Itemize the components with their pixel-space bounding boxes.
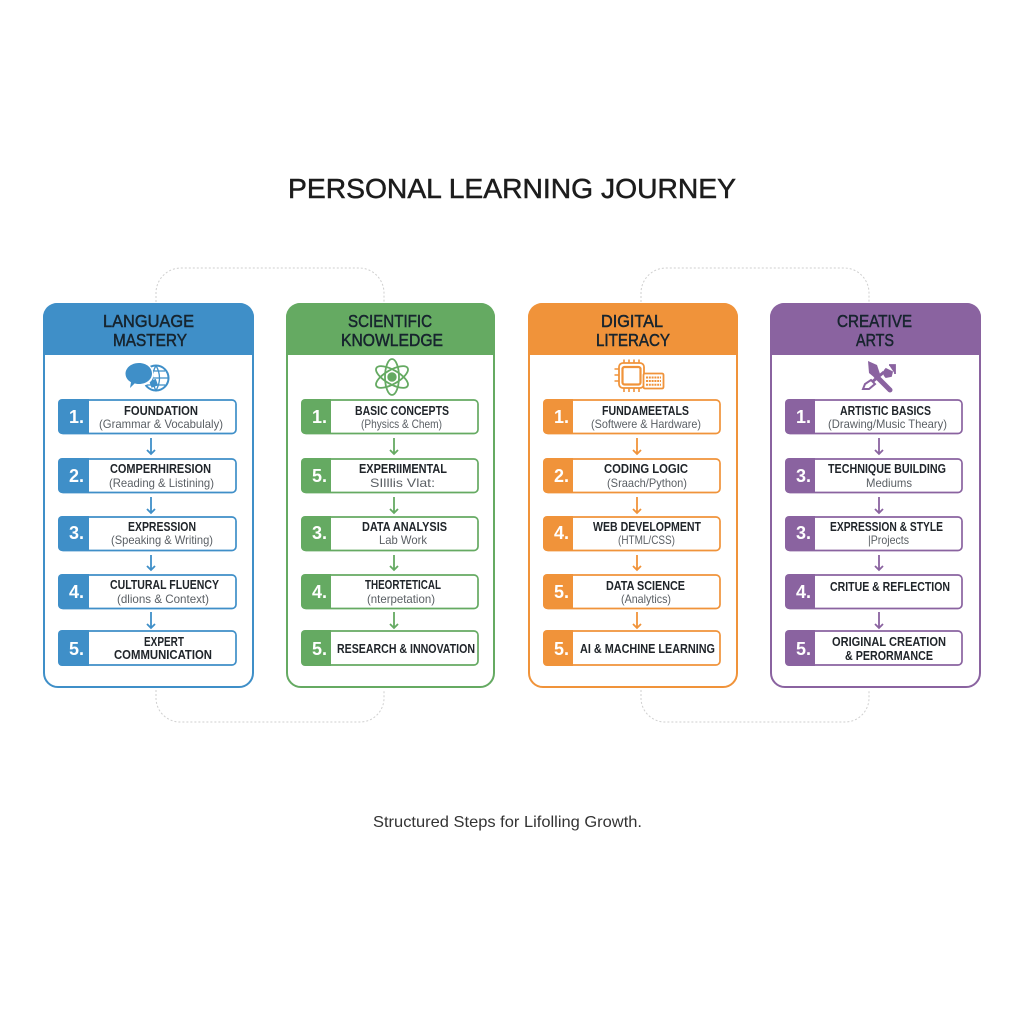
step 1: fundamentals: (Softwere & Hardware): [591, 417, 701, 431]
arrow: [147, 497, 155, 513]
panel: digital literacy: [528, 303, 738, 687]
step 2: coding logic: CODING LOGIC: [604, 462, 688, 476]
arrow: [875, 555, 883, 570]
arrow: [147, 438, 155, 454]
icon: crossed brush and tools: [863, 361, 895, 390]
step 1: artistic basics: [785, 399, 962, 434]
step 5: original creation: ORIGINAL CREATION: [832, 635, 946, 649]
step 3: expression: (Speaking & Writing): [111, 533, 213, 547]
step 1: artistic basics: ARTISTIC BASICS: [840, 404, 931, 418]
step 1: basic concepts: 1.: [312, 407, 327, 427]
arrow: [147, 612, 155, 628]
heading: language mastery: LANGUAGE: [103, 311, 194, 331]
arrow: [875, 438, 883, 454]
panel: creative arts: [770, 303, 981, 687]
step 2: experimental: EXPERIIMENTAL: [359, 462, 447, 476]
step 4: critique and reflection: 4.: [796, 582, 811, 602]
step 3: web development: [543, 516, 720, 551]
step 2: experimental: [301, 458, 478, 493]
step 3: expression and style: |Projects: [868, 533, 909, 547]
panel: scientific knowledge: [286, 303, 495, 687]
step 4: theoretical: [301, 574, 478, 609]
step 1: fundamentals: [543, 399, 720, 434]
step 5: expert communication: EXPERT: [144, 635, 184, 649]
heading: creative arts: CREATIVE: [837, 311, 912, 331]
step 2: coding logic: [543, 458, 720, 493]
heading: scientific knowledge: KNOWLEDGE: [341, 330, 443, 350]
step 1: artistic basics: 1.: [796, 407, 811, 427]
arrow: [875, 612, 883, 628]
heading: language mastery: [103, 311, 194, 350]
step 3: expression and style: 3.: [796, 523, 811, 543]
step 5: ai and machine learning: 5.: [554, 639, 569, 659]
step 2: comprehension: (Reading & Listining): [109, 476, 214, 490]
step 2: experimental: 5.: [312, 466, 327, 486]
step 3: expression and style: EXPRESSION & STYLE: [830, 520, 943, 534]
step 1: fundamentals: 1.: [554, 407, 569, 427]
arrow: [633, 497, 641, 513]
icon: speech bubble and globe: [126, 363, 168, 390]
step 5: expert communication: 5.: [69, 639, 84, 659]
icon: chip and keyboard: [614, 360, 664, 392]
step 4: theoretical: THEORTETICAL: [365, 578, 441, 592]
heading: digital literacy: [596, 311, 670, 350]
header band: scientific knowledge: [286, 303, 495, 355]
header band: language mastery: [43, 303, 254, 355]
step 5: expert communication: COMMUNICATION: [114, 648, 212, 662]
step 4: cultural fluency: CULTURAL FLUENCY: [110, 578, 220, 592]
step 4: data science: 5.: [554, 582, 569, 602]
step 4: critique and reflection: [785, 574, 962, 609]
step 4: theoretical: (nterpetation): [367, 592, 435, 606]
step 4: cultural fluency: (dlions & Context): [117, 592, 209, 606]
connector: top digital to creative: [641, 268, 869, 302]
heading: scientific knowledge: [341, 311, 443, 350]
step 3: data analysis: DATA ANALYSIS: [362, 520, 447, 534]
tagline: Structured Steps for Lifolling Growth.: [373, 814, 642, 831]
arrow: [390, 555, 398, 570]
heading: digital literacy: LITERACY: [596, 330, 670, 350]
icon: atom: [373, 359, 411, 395]
step 2: comprehension: 2.: [69, 466, 84, 486]
heading: digital literacy: DIGITAL: [601, 311, 663, 331]
arrow: [390, 612, 398, 628]
arrow: [633, 438, 641, 454]
step 3: expression and style: [785, 516, 962, 551]
heading: creative arts: ARTS: [856, 330, 894, 350]
step 5: original creation: 5.: [796, 639, 811, 659]
arrow: [147, 555, 155, 570]
step 4: cultural fluency: 4.: [69, 582, 84, 602]
step 2: experimental: SIlllis Vlat:: [370, 476, 435, 490]
step 2: coding logic: 2.: [554, 466, 569, 486]
step 5: original creation: & PERORMANCE: [845, 649, 933, 663]
step 2: coding logic: (Sraach/Python): [607, 476, 687, 490]
step 3: data analysis: [301, 516, 478, 551]
step 5: research and innovation: [301, 630, 478, 666]
step 5: research and innovation: RESEARCH & INNOVATION: [337, 642, 475, 656]
connector: bottom language to science: [156, 690, 384, 722]
step 1: foundation: 1.: [69, 407, 84, 427]
step 3: web development: 4.: [554, 523, 569, 543]
step 2: comprehension: COMPERHIRESION: [110, 462, 211, 476]
heading: creative arts: [837, 311, 912, 350]
connector: top language to science: [156, 268, 384, 302]
step 5: expert communication: [58, 630, 236, 666]
header band: creative arts: [770, 303, 981, 355]
heading: language mastery: MASTERY: [113, 330, 187, 350]
step 3: expression: 3.: [69, 523, 84, 543]
step 4: data science: [543, 574, 720, 609]
step 1: artistic basics: (Drawing/Music Theary): [828, 417, 947, 431]
title: PERSONAL LEARNING JOURNEY: [288, 173, 736, 204]
step 5: research and innovation: 5.: [312, 639, 327, 659]
step 2: technique building: 3.: [796, 466, 811, 486]
step 2: comprehension: [58, 458, 236, 493]
step 3: expression: [58, 516, 236, 551]
step 5: ai and machine learning: [543, 630, 720, 666]
step 5: ai and machine learning: AI & MACHINE LEARNING: [580, 642, 715, 656]
step 4: theoretical: 4.: [312, 582, 327, 602]
arrow: [633, 555, 641, 570]
step 1: basic concepts: [301, 399, 478, 434]
step 3: data analysis: Lab Work: [379, 533, 428, 547]
step 1: foundation: (Grammar & Vocabulaly): [99, 417, 223, 431]
step 4: data science: (Analytics): [621, 592, 671, 606]
step 2: technique building: [785, 458, 962, 493]
step 3: web development: WEB DEVELOPMENT: [593, 520, 701, 534]
arrow: [875, 497, 883, 513]
panel: language mastery: [43, 303, 254, 687]
step 3: web development: (HTML/CSS): [618, 533, 675, 547]
step 4: cultural fluency: [58, 574, 236, 609]
step 1: foundation: [58, 399, 236, 434]
step 1: basic concepts: (Physics & Chem): [361, 417, 442, 431]
arrow: [390, 438, 398, 454]
step 1: basic concepts: BASIC CONCEPTS: [355, 404, 449, 418]
step 3: data analysis: 3.: [312, 523, 327, 543]
arrow: [390, 497, 398, 513]
step 1: foundation: FOUNDATION: [124, 404, 198, 418]
step 4: data science: DATA SCIENCE: [606, 579, 685, 593]
header band: digital literacy: [528, 303, 738, 355]
connector: bottom digital to creative: [641, 690, 869, 722]
step 2: technique building: Mediums: [866, 476, 912, 490]
step 5: original creation: [785, 630, 962, 666]
step 1: fundamentals: FUNDAMEETALS: [602, 404, 689, 418]
step 3: expression: EXPRESSION: [128, 520, 196, 534]
step 2: technique building: TECHNIQUE BUILDING: [828, 462, 946, 476]
arrow: [633, 612, 641, 628]
step 4: critique and reflection: CRITUE & REFLECTION: [830, 580, 950, 594]
heading: scientific knowledge: SCIENTIFIC: [348, 311, 432, 331]
